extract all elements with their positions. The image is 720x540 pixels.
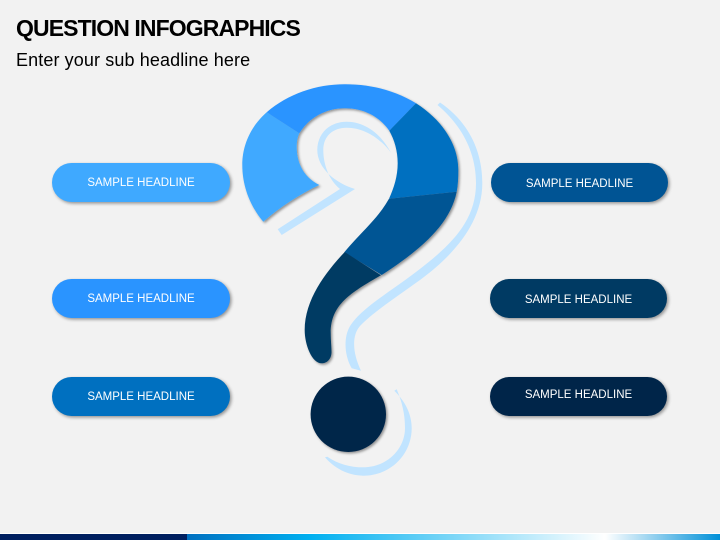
segment 2 xyxy=(267,84,416,133)
button: left 3 xyxy=(52,377,230,416)
accent: inner hook arc xyxy=(278,122,391,235)
button: right 3: SAMPLE HEADLINE xyxy=(525,389,632,401)
button: right 1 xyxy=(491,163,668,202)
segment 4 xyxy=(344,192,457,275)
button: left 1 xyxy=(52,163,230,202)
button: right 2: SAMPLE HEADLINE xyxy=(525,294,632,306)
button: left 1: SAMPLE HEADLINE xyxy=(87,177,195,189)
segment 1 xyxy=(242,112,319,222)
button: right 3 xyxy=(490,377,667,416)
question mark dot xyxy=(311,377,386,452)
button: left 3: SAMPLE HEADLINE xyxy=(87,391,195,403)
light accent arcs xyxy=(278,102,482,476)
segment 5 xyxy=(305,252,381,363)
accent: right outer arc xyxy=(346,102,482,371)
button: left 2 xyxy=(52,279,230,318)
button: right 1: SAMPLE HEADLINE xyxy=(526,178,633,190)
subtitle: Enter your sub headline here xyxy=(16,50,250,70)
question mark segments xyxy=(242,84,458,452)
segment 3 xyxy=(389,103,458,199)
button: right 2 xyxy=(490,279,667,318)
accent: arc under dot xyxy=(325,389,412,476)
button: left 2: SAMPLE HEADLINE xyxy=(87,293,195,305)
title: QUESTION INFOGRAPHICS xyxy=(16,15,300,41)
footer gradient bar xyxy=(0,533,720,540)
